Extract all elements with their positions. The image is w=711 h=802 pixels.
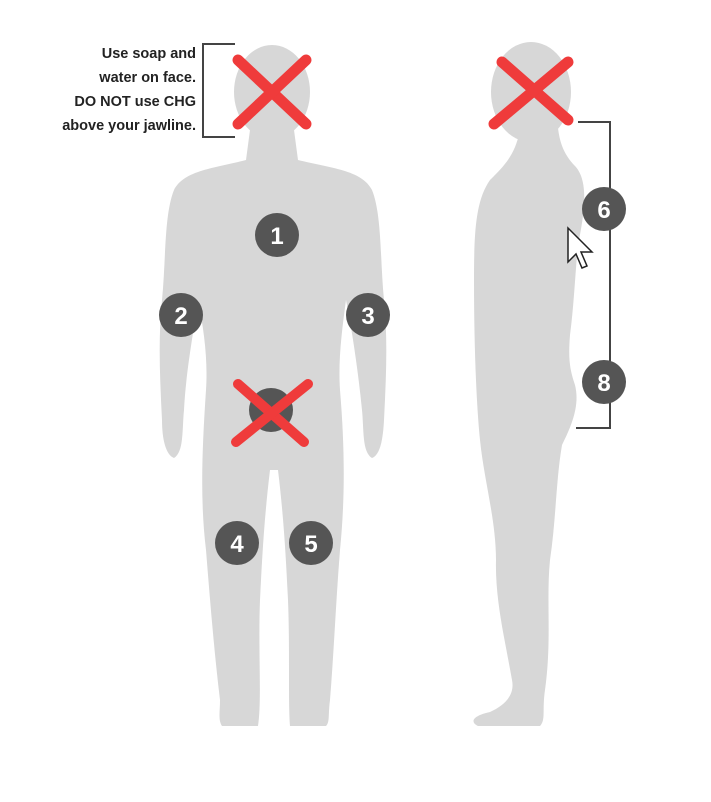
number circles bbox=[159, 187, 626, 565]
front body silhouette bbox=[160, 45, 386, 726]
callout text: face instructions: DO NOT use CHG bbox=[74, 94, 196, 110]
number circles: 8 bbox=[597, 370, 611, 397]
icon: mouse cursor bbox=[568, 228, 592, 268]
number circles: 3 bbox=[361, 303, 375, 330]
callout text: face instructions: Use soap and bbox=[102, 46, 196, 62]
callout text: face instructions: above your jawline. bbox=[62, 118, 196, 134]
number circles: 5 bbox=[304, 531, 318, 558]
number circles: 1 bbox=[270, 223, 284, 250]
bracket: face callout bbox=[203, 44, 235, 137]
callout text: face instructions: water on face. bbox=[98, 70, 196, 86]
bracket: side back bbox=[576, 122, 610, 428]
red X: front head bbox=[238, 60, 306, 124]
callout text: face instructions bbox=[62, 46, 196, 134]
side body silhouette bbox=[474, 42, 584, 726]
number circles: 6 bbox=[597, 197, 611, 224]
number circles: 2 bbox=[174, 303, 188, 330]
number circles: 4 bbox=[230, 531, 244, 558]
red X: groin bbox=[236, 384, 308, 442]
red X: side head bbox=[494, 62, 568, 124]
